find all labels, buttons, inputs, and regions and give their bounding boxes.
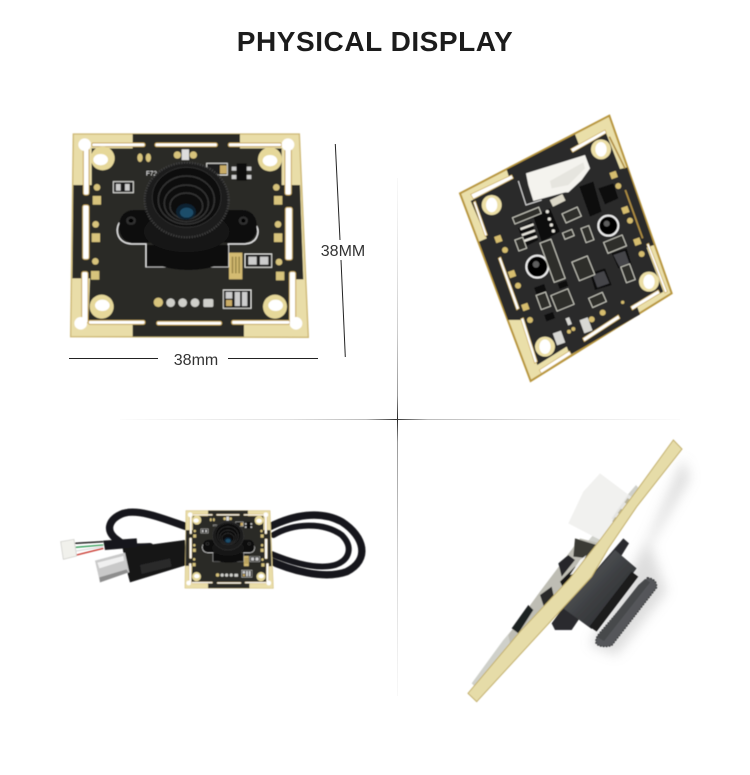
lens assembly bbox=[552, 538, 657, 647]
drop shadow bbox=[590, 458, 690, 655]
cross divider bbox=[120, 178, 680, 696]
photo: camera board side view bbox=[468, 440, 690, 702]
height measure: 38MM bbox=[321, 144, 365, 357]
photo: camera board front view bbox=[71, 134, 308, 337]
PCB side with components bbox=[472, 485, 642, 688]
photo: camera board with USB cable bbox=[61, 511, 362, 588]
cable loops bbox=[110, 512, 362, 575]
photo: camera board front view: F72 bbox=[146, 171, 157, 178]
photo: camera board back view bbox=[460, 116, 672, 381]
title: PHYSICAL DISPLAY bbox=[237, 26, 513, 57]
white connector bbox=[568, 473, 633, 542]
JST connector and wires bbox=[61, 539, 103, 559]
USB plug bbox=[95, 538, 187, 582]
width measure: 38mm: 38mm bbox=[174, 352, 218, 369]
height measure: 38MM: 38MM bbox=[321, 243, 365, 260]
miniature board bbox=[185, 511, 273, 588]
PCB edge bbox=[468, 440, 682, 702]
